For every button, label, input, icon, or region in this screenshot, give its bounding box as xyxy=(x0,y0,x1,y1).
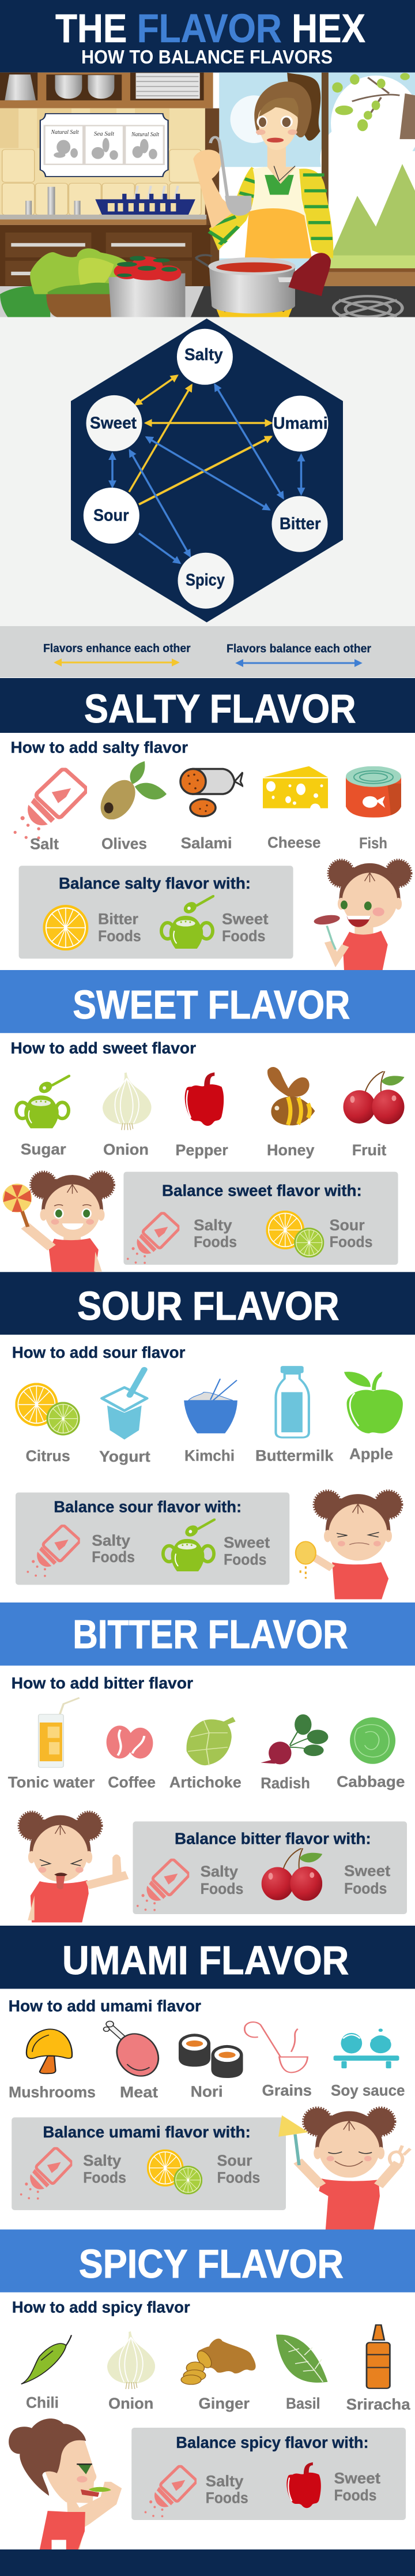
section header xyxy=(0,678,415,733)
balance panel: Balance sweet flavor with: xyxy=(162,1182,362,1200)
hexagon xyxy=(71,319,343,622)
icon: mushrooms xyxy=(27,2029,72,2073)
balance panel: Salty xyxy=(92,1532,130,1549)
title banner xyxy=(0,0,415,73)
food labels: Coffee xyxy=(108,1774,156,1791)
icon: ginger xyxy=(181,2339,256,2384)
food labels xyxy=(9,2082,405,2101)
illustration: woman cooking in kitchen: Sea Salt xyxy=(94,131,114,137)
panel: salty flavor xyxy=(0,678,415,971)
section header: SWEET FLAVOR xyxy=(73,982,350,1027)
balance panel: Foods xyxy=(98,927,141,945)
subheading: How to add spicy flavor xyxy=(12,2298,190,2316)
subtitle: HOW TO BALANCE FLAVORS xyxy=(81,47,333,68)
balance panel: Balance salty flavor with: xyxy=(59,874,251,892)
panel: flavor hex diagram xyxy=(0,317,415,627)
balance panel: Foods xyxy=(206,2489,248,2506)
food labels xyxy=(8,1773,405,1792)
balance panel: Balance sour flavor with: xyxy=(54,1498,242,1516)
food labels: Kimchi xyxy=(184,1447,235,1464)
footer band xyxy=(0,2549,415,2576)
balance panel: Balance spicy flavor with: xyxy=(176,2433,369,2451)
girl tasting bitter xyxy=(19,1812,127,1922)
balance panel: Foods xyxy=(330,1233,372,1250)
illustration: woman cooking in kitchen: Natural Salt xyxy=(131,132,159,138)
woman: sleeves xyxy=(209,167,265,250)
icon: fruit xyxy=(344,1071,405,1124)
section header: SOUR FLAVOR xyxy=(77,1283,339,1328)
section header: BITTER FLAVOR xyxy=(73,1612,348,1657)
panel: bitter flavor xyxy=(0,1602,415,1922)
food labels: Chili xyxy=(26,2394,59,2411)
icon: radish xyxy=(261,1714,328,1764)
girl squeezing lemon xyxy=(296,1491,402,1599)
icon: artichoke xyxy=(186,1717,236,1765)
balance panel: Foods xyxy=(194,1233,237,1250)
node: sour xyxy=(84,488,139,544)
food labels: Citrus xyxy=(25,1447,70,1465)
food labels: Yogurt xyxy=(99,1448,150,1465)
balance panel xyxy=(133,1821,407,1914)
balance panel: Sour xyxy=(330,1216,365,1234)
woman: hand and ladle xyxy=(193,149,236,229)
balance panel xyxy=(19,866,293,958)
icon: pepper xyxy=(185,1072,224,1126)
subheading: How to add salty flavor xyxy=(10,739,188,757)
balance panel: Sweet xyxy=(334,2469,380,2487)
food labels: Cheese xyxy=(267,834,320,851)
balance panel: Foods xyxy=(83,2169,126,2186)
node: umami: Umami xyxy=(273,414,328,433)
food labels: Ginger xyxy=(198,2395,250,2412)
mitt xyxy=(289,253,331,296)
balance panel: Sweet xyxy=(344,1862,390,1879)
icon: kimchi xyxy=(184,1379,237,1433)
icon: sugar xyxy=(16,1076,69,1128)
icon: apple xyxy=(344,1372,403,1433)
node: salty xyxy=(177,329,233,385)
balance panel: Salty xyxy=(194,1216,232,1234)
enhance arrows xyxy=(129,376,271,504)
legend: balance: Flavors balance each other xyxy=(227,642,371,655)
node: sweet: Sweet xyxy=(90,414,137,432)
greens xyxy=(0,286,50,317)
icon: basil xyxy=(276,2335,327,2383)
girl eating chili xyxy=(9,2418,122,2549)
icon: coffee xyxy=(107,1725,153,1758)
section header: SALTY FLAVOR xyxy=(84,686,356,731)
icon: soy sauce xyxy=(334,2028,399,2068)
panel: umami flavor xyxy=(0,1926,415,2230)
food labels: Apple xyxy=(349,1445,393,1462)
node: salty: Salty xyxy=(184,346,223,364)
icon: yogurt xyxy=(102,1369,147,1440)
food labels: Tonic water xyxy=(8,1774,95,1791)
food labels: Artichoke xyxy=(169,1774,242,1791)
food labels: Honey xyxy=(267,1141,315,1159)
balance panel: Foods xyxy=(222,927,265,945)
legend xyxy=(0,626,415,677)
food labels: Buttermilk xyxy=(255,1447,334,1464)
section header: SPICY FLAVOR xyxy=(79,2241,344,2286)
section header xyxy=(0,2230,415,2292)
food labels: Pepper xyxy=(175,1141,228,1159)
food labels: Olives xyxy=(101,835,147,852)
woman: hair back xyxy=(287,73,320,141)
food labels: Onion xyxy=(108,2395,153,2412)
balance arrows xyxy=(112,384,301,563)
icon: tonic water xyxy=(39,1698,80,1768)
icon: cheese xyxy=(263,766,328,808)
balance panel: Foods xyxy=(224,1551,266,1568)
node: bitter: Bitter xyxy=(280,515,320,533)
food labels: Cabbage xyxy=(337,1773,405,1790)
food labels: Sriracha xyxy=(346,2395,411,2413)
panel: sweet flavor xyxy=(0,970,415,1272)
balance panel: Balance bitter flavor with: xyxy=(175,1830,371,1848)
balance panel xyxy=(16,1492,289,1585)
big pot xyxy=(196,255,212,268)
legend: enhance: Flavors enhance each other xyxy=(43,642,191,655)
panel: spicy flavor xyxy=(0,2230,415,2549)
section header xyxy=(0,1272,415,1335)
node: umami xyxy=(272,396,329,452)
food labels: Salami xyxy=(181,834,232,852)
balance panel: Foods xyxy=(201,1880,243,1897)
balance panel: Balance umami flavor with: xyxy=(43,2123,251,2141)
balance panel xyxy=(131,2428,406,2520)
icon: salami xyxy=(179,767,243,817)
food labels: Sugar xyxy=(21,1140,66,1158)
food labels xyxy=(25,1445,393,1465)
icon: onion xyxy=(107,2331,155,2389)
food labels: Meat xyxy=(120,2083,158,2101)
subheading: How to add sweet flavor xyxy=(10,1039,196,1057)
food labels: Grains xyxy=(262,2082,312,2099)
girl enjoying umami xyxy=(278,2108,410,2230)
section header: UMAMI FLAVOR xyxy=(62,1938,349,1983)
balance panel: Foods xyxy=(334,2487,376,2504)
icon: canned fish xyxy=(346,766,401,818)
food labels xyxy=(26,2394,411,2413)
balance panel: Bitter xyxy=(98,911,138,928)
balance panel: Foods xyxy=(92,1548,135,1566)
section header xyxy=(0,970,415,1033)
icon: honey bee xyxy=(267,1067,315,1125)
icon: sriracha xyxy=(367,2325,390,2388)
food labels xyxy=(30,834,387,853)
girl eating sausage xyxy=(313,860,411,971)
food labels: Radish xyxy=(261,1774,310,1792)
food labels: Fruit xyxy=(352,1141,386,1159)
food labels: Fish xyxy=(359,834,387,852)
title: THE FLAVOR HEX xyxy=(55,6,365,51)
node: sweet xyxy=(86,395,142,451)
icon: onion xyxy=(103,1072,152,1130)
node: spicy xyxy=(178,553,234,609)
subheading: How to add sour flavor xyxy=(12,1343,185,1361)
balance panel xyxy=(123,1172,398,1265)
food labels: Nori xyxy=(191,2083,223,2101)
node: bitter xyxy=(272,496,327,552)
balance panel: Salty xyxy=(83,2152,121,2169)
icon: chili xyxy=(21,2335,71,2384)
food labels: Soy sauce xyxy=(331,2082,405,2099)
icon: salt xyxy=(14,769,86,839)
balance panel: Salty xyxy=(206,2472,243,2489)
node: sour: Sour xyxy=(93,507,129,525)
section header xyxy=(0,1602,415,1665)
icon: meat xyxy=(104,2021,164,2080)
food labels: Onion xyxy=(103,1141,149,1158)
subheading: How to add bitter flavor xyxy=(12,1674,193,1692)
subheading: How to add umami flavor xyxy=(9,1997,201,2015)
food labels: Basil xyxy=(286,2395,320,2412)
food labels xyxy=(21,1140,386,1159)
balance panel xyxy=(12,2117,286,2210)
balance panel: Foods xyxy=(217,2169,260,2186)
icon: grains xyxy=(244,2022,308,2072)
food labels: Mushrooms xyxy=(9,2083,96,2101)
icon: buttermilk xyxy=(276,1366,309,1437)
icon: cabbage xyxy=(350,1717,395,1764)
section header xyxy=(0,1926,415,1989)
icon: olive xyxy=(100,761,167,819)
girl with lollipop xyxy=(3,1172,114,1272)
food labels: Salt xyxy=(30,836,59,853)
balance panel: Salty xyxy=(201,1863,238,1880)
balance panel: Sweet xyxy=(224,1534,270,1551)
balance panel: Sour xyxy=(217,2152,252,2169)
illustration: woman cooking in kitchen xyxy=(0,73,415,320)
balance panel: Sweet xyxy=(222,911,269,928)
icon: nori xyxy=(179,2034,243,2078)
balance panel: Foods xyxy=(344,1879,387,1897)
icon: citrus xyxy=(15,1383,80,1436)
node: spicy: Spicy xyxy=(186,571,225,590)
poster labels: Natural Salt xyxy=(51,129,79,136)
panel: sour flavor xyxy=(0,1272,415,1599)
